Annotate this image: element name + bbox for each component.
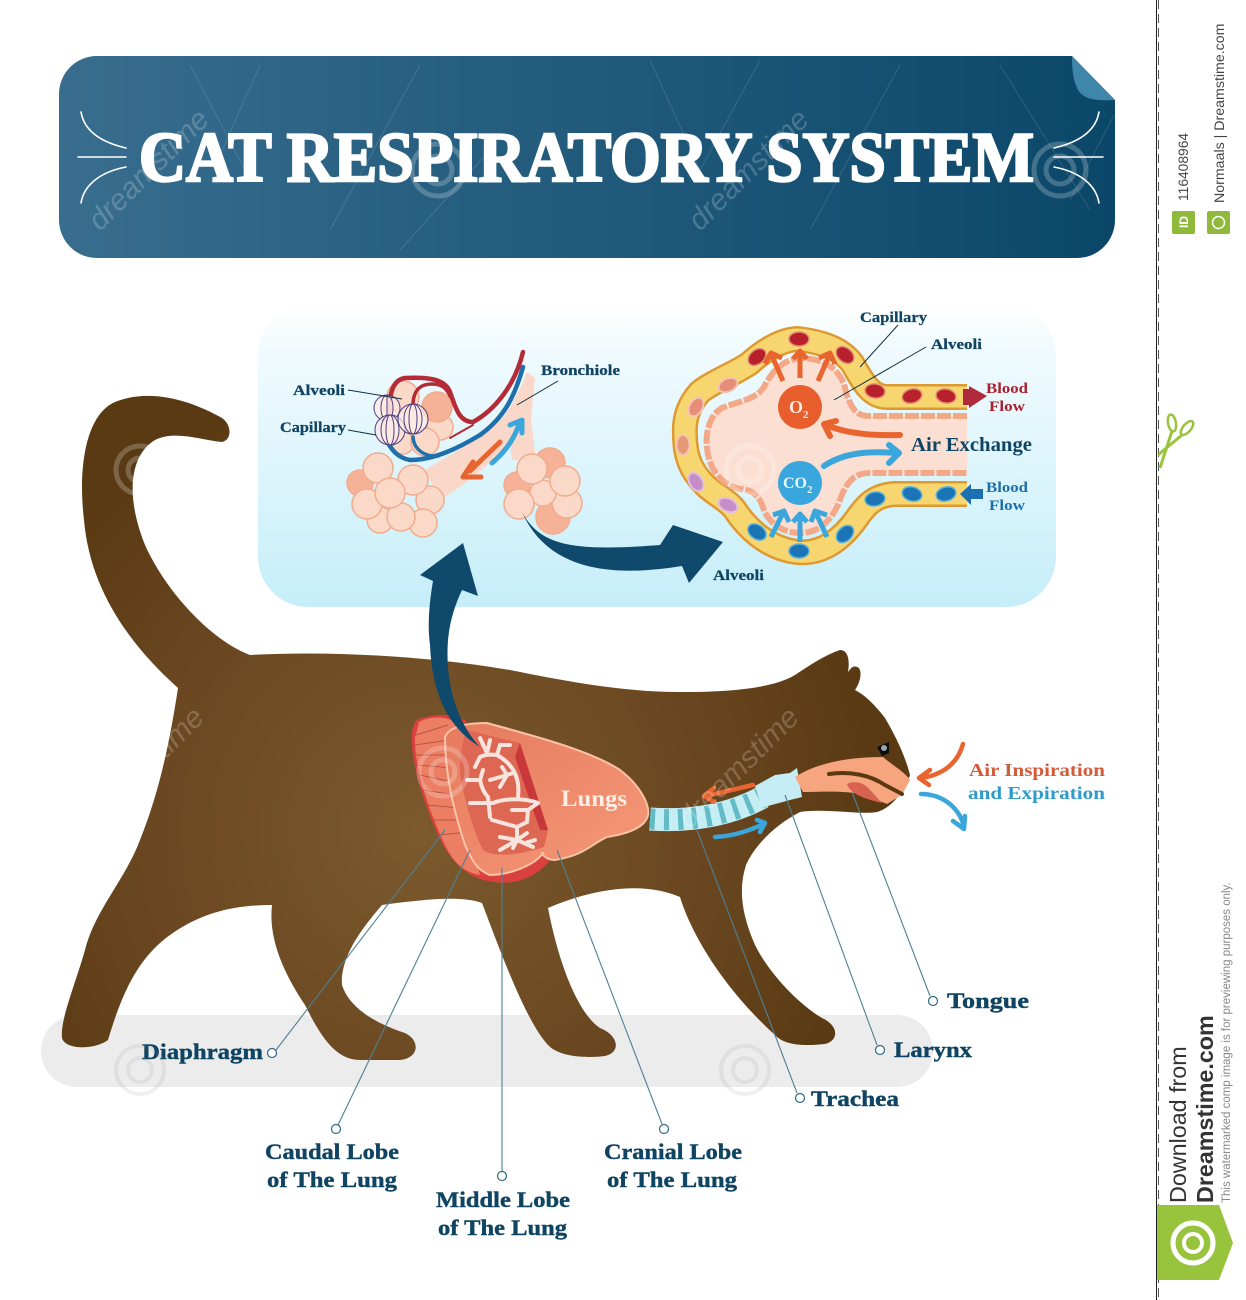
blood flow direction arrows bbox=[960, 386, 987, 505]
airflow arrows in bronchiole bbox=[463, 420, 522, 477]
panel: alveoli detail background bbox=[258, 305, 1056, 607]
anatomy labels: of The Lung bbox=[267, 1167, 397, 1192]
air inspiration text: Air Inspiration bbox=[969, 760, 1105, 780]
labels: right detail: Blood bbox=[986, 381, 1029, 397]
carbon dioxide circle bbox=[778, 461, 822, 505]
watermarks: dreamstime bbox=[77, 701, 211, 835]
bronchiole branch and alveoli clusters bbox=[347, 372, 582, 537]
red blood cells bbox=[745, 332, 957, 405]
stock id bbox=[1172, 133, 1195, 234]
labels: right detail: Capillary bbox=[860, 310, 928, 326]
diaphragm muscle bbox=[412, 715, 550, 883]
dark inner band bbox=[515, 743, 548, 830]
oxygen circle: O bbox=[789, 397, 803, 417]
trachea bbox=[650, 768, 802, 820]
carbon dioxide circle: 2 bbox=[807, 484, 813, 496]
tongue bbox=[847, 782, 882, 803]
lower right alveoli cluster bbox=[504, 448, 582, 534]
mouth line bbox=[829, 773, 902, 794]
watermarks bbox=[77, 103, 1086, 1094]
larynx bbox=[755, 768, 802, 808]
dreamstime badge bbox=[1157, 1205, 1233, 1280]
watermarks: dreamstime bbox=[682, 103, 816, 237]
blood vessels around alveoli bbox=[388, 352, 523, 460]
transition blood cells bbox=[676, 375, 740, 515]
watermarks: dreamstime bbox=[672, 701, 806, 835]
credit: Normaals | Dreamstime.com bbox=[1212, 24, 1228, 203]
lower left alveoli cluster bbox=[347, 453, 444, 537]
anatomy labels: of The Lung bbox=[607, 1167, 737, 1192]
whiskers right bbox=[1054, 112, 1103, 203]
capillary spheres bbox=[374, 395, 428, 445]
anatomy labels: Tongue bbox=[947, 988, 1029, 1013]
cut line bbox=[1156, 0, 1158, 1300]
labels: left detail: Capillary bbox=[280, 420, 347, 436]
leader lines bbox=[268, 792, 938, 1180]
oxygen circle: 2 bbox=[803, 409, 809, 421]
lungs label: Lungs bbox=[561, 786, 627, 811]
lung cut section bbox=[460, 730, 548, 855]
labels: right detail: Flow bbox=[989, 399, 1025, 415]
title banner bbox=[59, 56, 1115, 258]
capillary lumen bbox=[685, 339, 967, 552]
oxygen circle bbox=[778, 385, 822, 429]
scissors icon bbox=[1158, 414, 1196, 468]
credit bbox=[1207, 24, 1230, 234]
anatomy labels: Trachea bbox=[811, 1086, 899, 1111]
labels: right detail bbox=[713, 310, 1032, 584]
labels: right detail: Air Exchange bbox=[911, 434, 1032, 456]
bronchial tree bbox=[467, 738, 538, 850]
labels: right detail: Blood bbox=[986, 480, 1029, 496]
arrow: alveoli to exchange detail bbox=[522, 512, 723, 583]
anatomy labels: Diaphragm bbox=[142, 1039, 263, 1064]
labels: left detail: Bronchiole bbox=[541, 363, 620, 379]
labels: right detail: Flow bbox=[989, 498, 1025, 514]
banner watermark lines bbox=[190, 60, 1114, 250]
title text: CAT RESPIRATORY SYSTEM bbox=[139, 119, 1034, 197]
air exchange arrows bbox=[824, 421, 900, 466]
labels: right detail: Alveoli bbox=[931, 337, 982, 353]
watermarks: dreamstime bbox=[82, 103, 216, 237]
blue carbon dioxide arrows bbox=[771, 511, 827, 542]
anatomy labels bbox=[142, 988, 1029, 1240]
alveolus cross section bbox=[676, 332, 987, 558]
download text bbox=[1165, 882, 1233, 1203]
eye bbox=[877, 742, 889, 756]
alveolus wall bbox=[707, 358, 967, 533]
alveolus interior bbox=[707, 358, 967, 533]
capillary wall bbox=[685, 339, 967, 552]
whiskers left bbox=[78, 112, 126, 203]
labels: right detail: Alveoli bbox=[713, 568, 764, 584]
air inspiration text bbox=[968, 760, 1105, 803]
air inspiration text: and Expiration bbox=[968, 783, 1105, 803]
stock id: ID bbox=[1177, 216, 1191, 228]
anatomy labels: Larynx bbox=[894, 1037, 972, 1062]
anatomy labels: Middle Lobe bbox=[436, 1187, 570, 1212]
arrow: lung to detail bbox=[420, 543, 480, 747]
lungs bbox=[412, 715, 648, 883]
carbon dioxide circle: CO bbox=[783, 475, 807, 492]
download text: This watermarked comp image is for previewing purposes only. bbox=[1221, 882, 1233, 1203]
download text: Dreamstime.com bbox=[1192, 1015, 1218, 1203]
anatomy labels: of The Lung bbox=[438, 1215, 567, 1240]
stock id: 116408964 bbox=[1176, 133, 1191, 201]
bronchiole tube bbox=[425, 372, 536, 500]
orange oxygen arrows bbox=[765, 351, 835, 381]
download text: Download from bbox=[1165, 1046, 1191, 1203]
trachea airflow arrows bbox=[704, 785, 765, 837]
mouth and throat bbox=[795, 742, 910, 804]
anatomy labels: Cranial Lobe bbox=[604, 1139, 742, 1164]
anatomy labels: Caudal Lobe bbox=[265, 1139, 399, 1164]
labels: left detail: Alveoli bbox=[293, 383, 345, 399]
labels: left detail bbox=[280, 363, 620, 436]
main lung body bbox=[445, 723, 648, 875]
cat silhouette bbox=[62, 396, 910, 1060]
blue blood cells bbox=[745, 485, 957, 558]
ground shadow bbox=[41, 1015, 933, 1087]
upper alveoli cluster bbox=[387, 381, 453, 456]
air inspiration and expiration arrows bbox=[919, 744, 965, 829]
